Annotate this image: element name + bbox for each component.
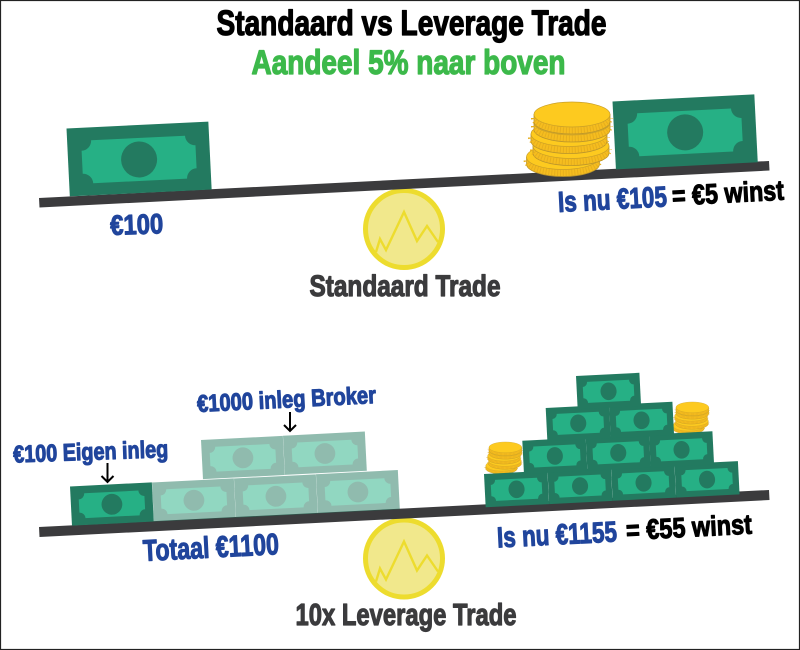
title: Standaard vs Leverage Trade: [216, 3, 606, 43]
seesaw beam: [39, 490, 770, 537]
panel: standard trade: [39, 94, 785, 303]
banknote pyramid: [484, 373, 740, 507]
label: 55 euro profit: = €55 winst: [625, 509, 753, 546]
icon: small coin stack right: [673, 402, 709, 434]
panel: leverage trade: [13, 373, 770, 632]
broker money banknotes: [152, 432, 400, 522]
label: broker money: €1000 inleg Broker: [196, 382, 377, 418]
icon: banknote right: [612, 94, 758, 169]
heading: leverage trade: 10x Leverage Trade: [296, 597, 516, 632]
seesaw beam: [39, 161, 770, 208]
icon: coin stack: [527, 102, 610, 176]
label: now 1155 euro: Is nu €1155: [496, 516, 618, 554]
label: total: Totaal €1100: [142, 528, 280, 568]
heading: standard trade: Standaard Trade: [310, 270, 500, 303]
subtitle: Aandeel 5% naar boven: [252, 44, 566, 82]
icon: small coin stack left: [486, 442, 522, 474]
label: now 105 euro: Is nu €105: [557, 181, 668, 219]
icon: chart pivot coin: [366, 190, 442, 268]
arrow: own money: [102, 463, 114, 482]
own money banknote: [70, 482, 154, 526]
label: own money: €100 Eigen inleg: [13, 436, 169, 468]
arrow: broker money: [284, 412, 296, 431]
label: 100 euro: €100: [110, 208, 164, 241]
icon: chart pivot coin: [366, 520, 442, 597]
icon: banknote left: [66, 122, 212, 196]
